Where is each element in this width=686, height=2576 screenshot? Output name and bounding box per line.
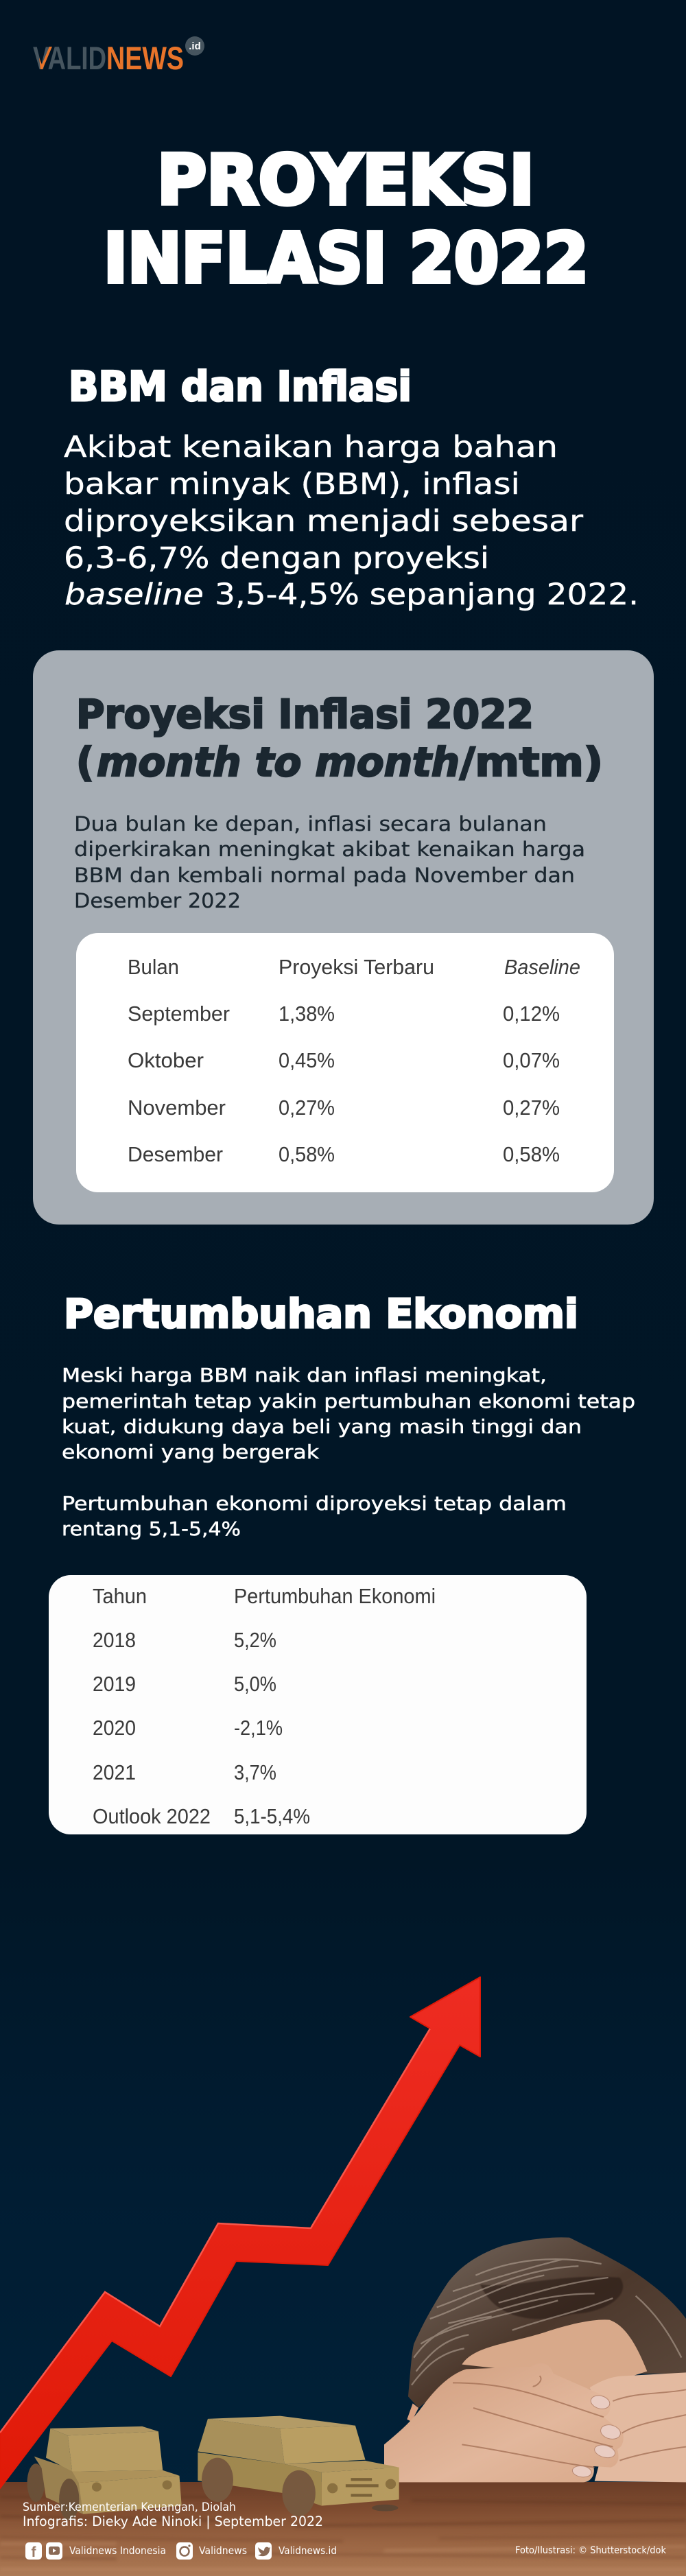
table: proyeksi bulanan: 0,45% — [279, 1048, 335, 1072]
logo: Validnews.id — [33, 36, 204, 76]
table top — [0, 2482, 686, 2576]
table: proyeksi bulanan: Bulan — [128, 955, 179, 979]
left hand — [384, 2363, 624, 2482]
table: proyeksi bulanan: Desember — [128, 1142, 223, 1166]
table: pertumbuhan ekonomi: Outlook 2022 — [93, 1804, 211, 1828]
text block: pertumbuhan ekonomi — [62, 1364, 635, 1540]
title — [104, 140, 589, 298]
photo: man covering face — [384, 2237, 686, 2482]
text block: BBM intro: bakar minyak (BBM), inflasi — [64, 467, 520, 501]
table: proyeksi bulanan: 0,07% — [503, 1048, 560, 1072]
table: proyeksi bulanan: Baseline — [504, 955, 580, 979]
table: proyeksi bulanan: Oktober — [128, 1048, 204, 1072]
panel text: BBM dan kembali normal pada November dan — [74, 864, 575, 887]
arrow: rising red arrow — [0, 1977, 480, 2488]
text block: BBM intro — [64, 430, 639, 612]
hair — [408, 2237, 686, 2408]
text block: pertumbuhan ekonomi: rentang 5,1-5,4% — [62, 1517, 241, 1540]
panel heading: /mtm) — [460, 739, 603, 785]
icon: facebook — [25, 2542, 42, 2560]
panel: proyeksi inflasi bulanan — [33, 650, 654, 1225]
credits: Sumber:Kementerian Keuangan, Diolah — [23, 2501, 236, 2514]
text block: BBM intro: 3,5-4,5% sepanjang 2022. — [215, 578, 639, 612]
panel text: diperkirakan meningkat akibat kenaikan harga — [74, 838, 585, 861]
icon: instagram — [176, 2542, 193, 2560]
table: proyeksi bulanan: 0,27% — [279, 1096, 335, 1120]
table: pertumbuhan ekonomi: 5,1-5,4% — [234, 1804, 310, 1828]
panel text: Desember 2022 — [74, 889, 241, 912]
table: proyeksi bulanan: 0,58% — [279, 1142, 335, 1166]
car: small — [27, 2426, 182, 2520]
table: proyeksi bulanan: 0,58% — [503, 1142, 560, 1166]
table: pertumbuhan ekonomi: 2018 — [93, 1628, 136, 1652]
table: pertumbuhan ekonomi: 2020 — [93, 1716, 136, 1740]
panel text: Dua bulan ke depan, inflasi secara bulanan — [74, 812, 547, 836]
logo: Validnews.id: NEWS — [106, 40, 184, 76]
table: pertumbuhan ekonomi — [49, 1575, 587, 1834]
ear — [407, 2403, 418, 2422]
text block: BBM intro: 6,3-6,7% dengan proyeksi — [64, 541, 489, 576]
text block: BBM intro: baseline — [64, 578, 204, 612]
illustration: wooden toy cars — [27, 2416, 399, 2520]
logo: Validnews.id: VALID — [33, 40, 106, 76]
table: proyeksi bulanan: September — [128, 1002, 230, 1026]
table: pertumbuhan ekonomi: 2019 — [93, 1672, 136, 1696]
table: pertumbuhan ekonomi: Pertumbuhan Ekonomi — [234, 1584, 436, 1608]
logo: Validnews.id: .id — [189, 40, 201, 52]
text block: pertumbuhan ekonomi: Pertumbuhan ekonomi diproyeksi tetap dalam — [62, 1492, 567, 1515]
label: instagram: Validnews — [199, 2544, 247, 2557]
table: proyeksi bulanan: 1,38% — [279, 1002, 335, 1026]
text block: pertumbuhan ekonomi: Meski harga BBM naik dan inflasi meningkat, — [62, 1364, 547, 1386]
table: proyeksi bulanan: November — [128, 1096, 226, 1120]
text block: pertumbuhan ekonomi: pemerintah tetap yakin pertumbuhan ekonomi tetap — [62, 1390, 635, 1413]
text block: BBM intro: Akibat kenaikan harga bahan — [64, 430, 558, 464]
table: proyeksi bulanan: Proyeksi Terbaru — [279, 955, 434, 979]
table: pertumbuhan ekonomi: 5,0% — [234, 1672, 276, 1696]
finger nails — [571, 2394, 622, 2479]
panel heading — [76, 691, 603, 785]
table: pertumbuhan ekonomi: Tahun — [93, 1584, 147, 1608]
text block: pertumbuhan ekonomi: ekonomi yang bergerak — [62, 1441, 320, 1463]
table: proyeksi bulanan — [76, 933, 614, 1192]
credits: Infografis: Dieky Ade Ninoki | September 2022 — [23, 2514, 323, 2529]
label: twitter: Validnews.id — [279, 2544, 337, 2557]
table: pertumbuhan ekonomi: 5,2% — [234, 1628, 276, 1652]
title: INFLASI 2022 — [104, 218, 589, 298]
car: large — [198, 2416, 399, 2516]
table: proyeksi bulanan: 0,27% — [503, 1096, 560, 1120]
table: proyeksi bulanan: 0,12% — [503, 1002, 560, 1026]
panel text — [74, 812, 585, 912]
table: pertumbuhan ekonomi: 3,7% — [234, 1760, 276, 1784]
social media row — [25, 2542, 337, 2560]
table: pertumbuhan ekonomi: -2,1% — [234, 1716, 283, 1740]
text block: BBM intro: diproyeksikan menjadi sebesar — [64, 504, 583, 539]
label: facebook and youtube: Validnews Indonesia — [69, 2544, 166, 2557]
right hand — [590, 2372, 686, 2482]
forehead — [462, 2319, 647, 2389]
icon: twitter — [255, 2542, 272, 2560]
title: PROYEKSI — [157, 140, 534, 220]
icon: youtube — [46, 2542, 62, 2560]
text block: pertumbuhan ekonomi: kuat, didukung daya beli yang masih tinggi dan — [62, 1415, 582, 1438]
icon: facebook: f — [32, 2544, 37, 2560]
panel heading: Proyeksi Inflasi 2022 — [76, 691, 534, 737]
panel heading: ( — [76, 739, 94, 785]
photo credit: Foto/Ilustrasi: © Shutterstock/dok — [515, 2545, 667, 2556]
heading: BBM dan Inflasi: BBM dan Inflasi — [69, 363, 412, 411]
heading: Pertumbuhan Ekonomi: Pertumbuhan Ekonomi — [64, 1290, 578, 1337]
panel heading: month to month — [97, 739, 460, 785]
table: pertumbuhan ekonomi: 2021 — [93, 1760, 136, 1784]
finger lines — [453, 2376, 686, 2468]
credits — [23, 2501, 323, 2529]
